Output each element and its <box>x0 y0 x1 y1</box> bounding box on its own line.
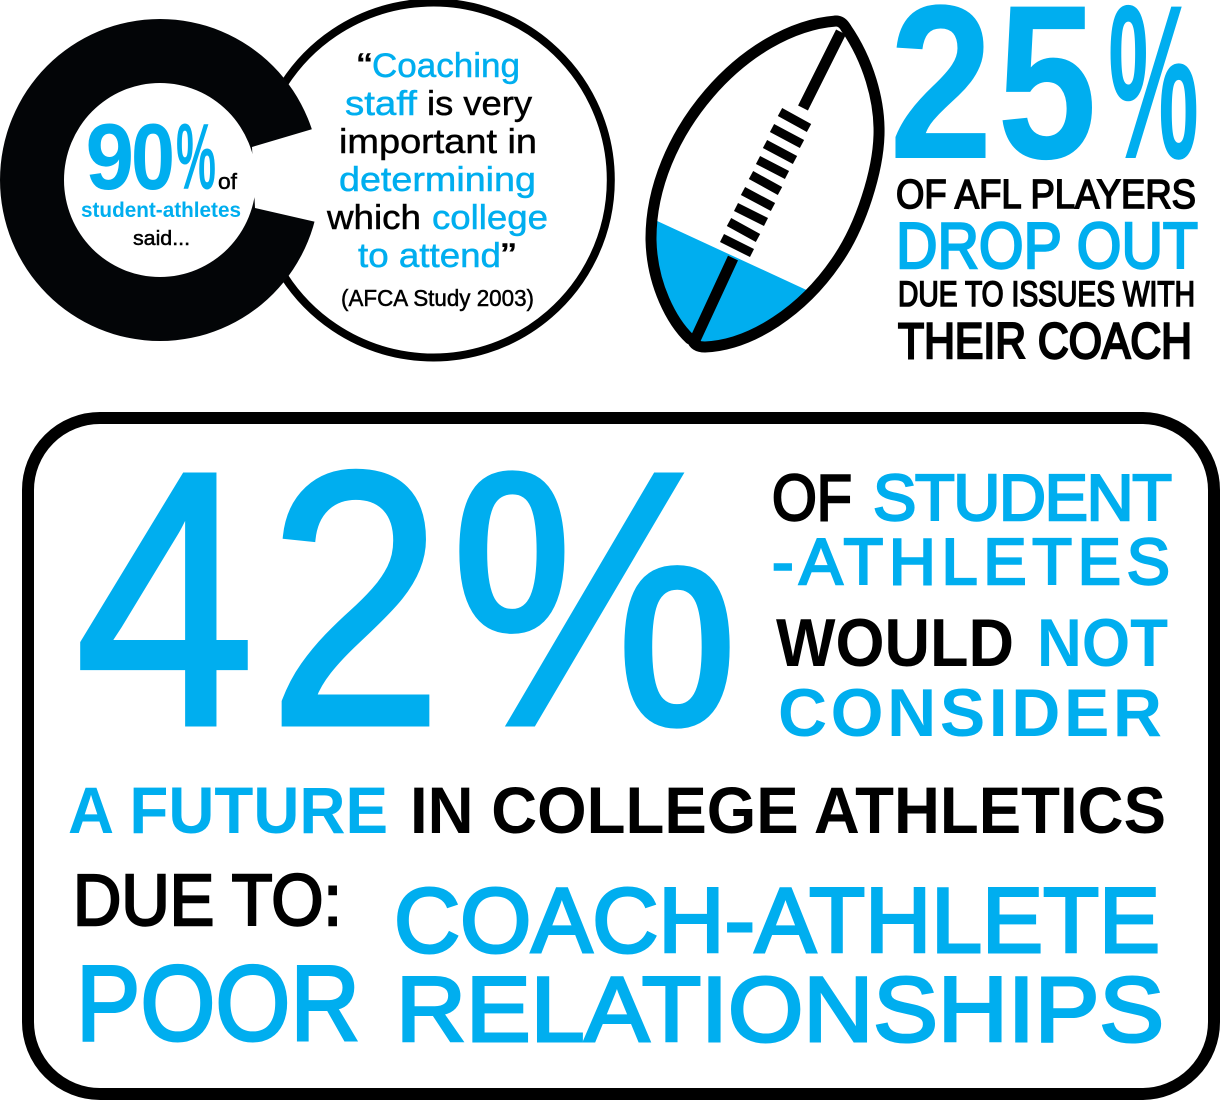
90 percent figure: 0 <box>131 104 175 209</box>
would: WOULD <box>776 605 1014 681</box>
said label: said... <box>133 228 190 250</box>
of text: OF <box>772 461 852 534</box>
consider: CONSIDER <box>778 675 1162 751</box>
not: NOT <box>1037 605 1168 681</box>
football left edge <box>651 21 836 339</box>
football laces <box>722 112 809 253</box>
quote text: staff <box>345 85 418 123</box>
relationships: RELATIONSHIPS <box>396 959 1164 1061</box>
student word: STUDENT <box>873 461 1172 534</box>
25 percent figure <box>889 0 1199 205</box>
black C ring <box>0 19 340 341</box>
quote circle outline <box>284 3 611 357</box>
quote text: ” <box>501 237 516 275</box>
quote text: determining <box>339 161 536 199</box>
poor: POOR <box>76 943 360 1063</box>
42 percent figure: 4 <box>75 396 255 801</box>
student-athletes label: student-athletes <box>81 199 241 222</box>
football spine <box>695 32 841 340</box>
quote text: important in <box>339 123 537 161</box>
42 percent figure: % <box>450 396 739 801</box>
quote text: Coaching <box>372 47 520 85</box>
90 percent figure <box>86 104 216 209</box>
athletes word: -ATHLETES <box>772 525 1170 598</box>
panel: 42 percent statistic <box>28 396 1214 1094</box>
quote text: “ <box>357 47 372 85</box>
due to: DUE TO: <box>73 861 342 941</box>
quote text: college <box>432 199 548 237</box>
football blue fill <box>655 220 813 346</box>
rounded border <box>28 418 1214 1094</box>
citation: (AFCA Study 2003) <box>341 285 534 311</box>
panel: quote statistic <box>0 3 611 357</box>
quote text: to attend <box>358 237 501 275</box>
of label: of <box>218 169 238 194</box>
football right edge <box>692 28 879 347</box>
42 percent figure: 2 <box>268 396 443 801</box>
icon: football quarter filled <box>651 21 879 347</box>
a future: A FUTURE <box>68 773 388 847</box>
panel: quote statistic: % <box>176 104 216 209</box>
quote text: is very <box>427 85 532 123</box>
42 percent figure <box>75 396 739 801</box>
in college athletics: IN COLLEGE ATHLETICS <box>410 773 1166 847</box>
coach-athlete: COACH-ATHLETE <box>394 870 1160 972</box>
90 percent figure: 9 <box>86 104 134 209</box>
quote text: which <box>326 199 421 237</box>
panel: 25 percent statistic <box>889 0 1199 369</box>
quote text <box>326 47 548 275</box>
